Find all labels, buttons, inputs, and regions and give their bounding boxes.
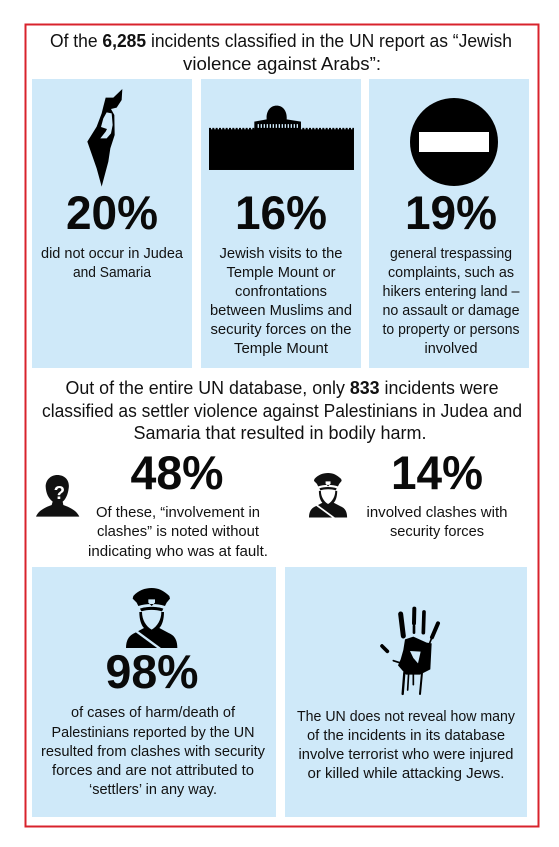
description: complaints, such as [388,264,514,281]
icon: bloody hand print [382,609,438,694]
description [366,504,508,540]
description: did not occur in Judea [41,245,184,262]
description: to property or persons [382,321,520,338]
description [88,504,268,560]
description: security forces [390,523,484,540]
description [382,245,520,357]
description: and Samaria [73,264,152,281]
description: Of these, “involvement in [96,504,260,521]
description: Jewish visits to the [220,245,342,262]
description: or killed while attacking Jews. [308,765,504,782]
panel: 20 percent outside Judea and Samaria [32,79,192,368]
percentage: 14% [391,446,483,499]
description [41,704,265,798]
description: The UN does not reveal how many [297,708,515,725]
panel: 19 percent trespassing [369,79,529,368]
description: no assault or damage [382,302,520,319]
percentage: 20% [66,186,158,239]
description: general trespassing [390,245,512,262]
description: involve terrorist who were injured [298,746,514,763]
panel: 16 percent Temple Mount [201,79,361,368]
description [41,245,184,281]
description: Palestinians reported by the UN [52,724,254,741]
description [297,708,515,782]
description: indicating who was at fault. [88,543,268,560]
description [210,245,352,357]
title: violence against Arabs”: [183,54,381,74]
description: confrontations [235,283,327,300]
description: ‘settlers’ in any way. [89,781,217,798]
description: between Muslims and [210,302,352,319]
panel: 98 percent [32,567,276,817]
middle heading: Out of the entire UN database, only 833 incidents were [66,378,498,398]
middle heading: classified as settler violence against Palestinians in Judea and [42,401,522,421]
title: Of the 6,285 incidents classified in the UN report as “Jewish [50,31,512,51]
percentage: 19% [405,186,497,239]
percentage: 98% [106,645,198,698]
description: of the incidents in its database [307,727,505,744]
description: hikers entering land – [382,283,520,300]
description: clashes” is noted without [97,523,260,540]
icon: no entry sign [410,98,498,186]
description: of cases of harm/death of [71,704,236,721]
description: involved [424,340,478,357]
description: involved clashes with [366,504,508,521]
description: Temple Mount or [226,264,336,281]
icon: security officer large [126,588,177,649]
percentage: 48% [130,446,224,499]
icon: security officer [309,473,347,518]
stat: 48 percent [36,446,268,560]
middle heading [42,378,522,443]
stat: 14 percent [309,446,508,540]
description: resulted from clashes with security [41,743,265,760]
icon: anonymous person with question mark [36,475,79,517]
description: forces and are not attributed to [52,762,254,779]
description: Temple Mount [234,340,329,357]
icon: Temple Mount wall and dome [209,106,354,170]
icon: map silhouette [87,89,122,187]
icon: anonymous person with question mark: ? [54,482,65,503]
middle heading: Samaria that resulted in bodily harm. [134,423,426,443]
description: security forces on the [210,321,352,338]
panel: UN does not reveal [285,567,527,817]
percentage: 16% [235,186,327,239]
title [50,31,512,74]
